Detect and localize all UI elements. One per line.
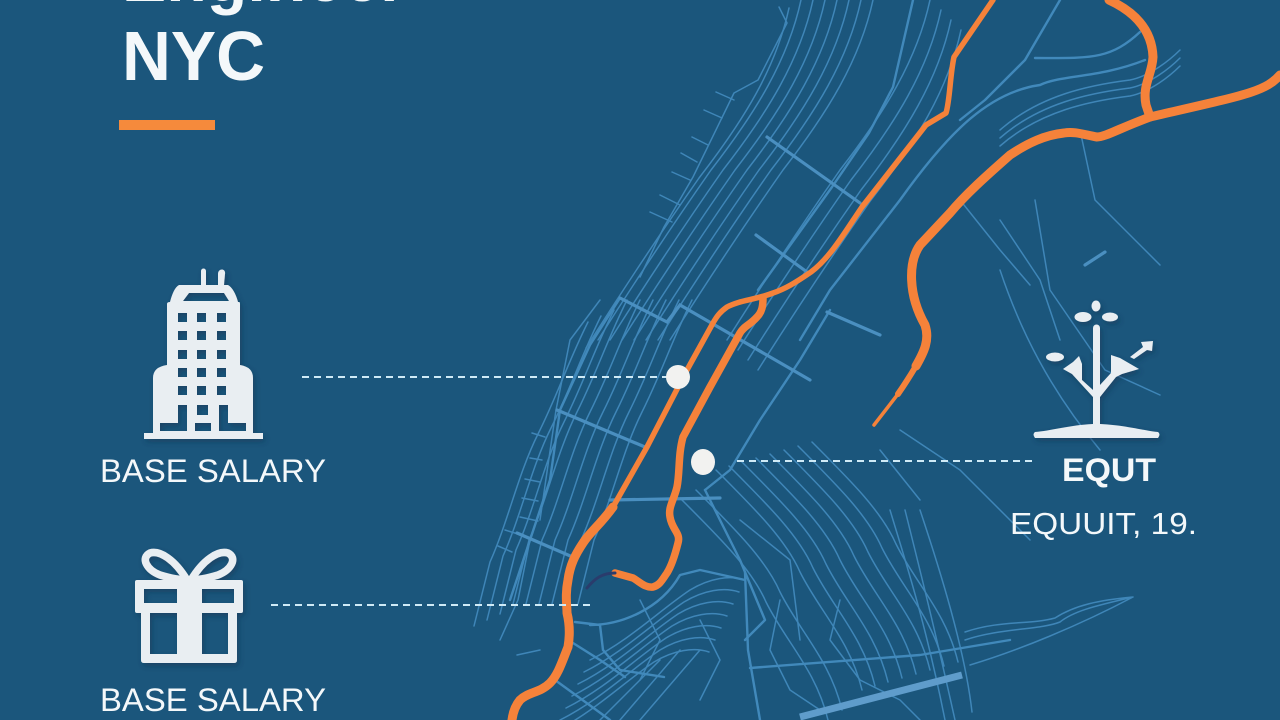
- title accent bar: [119, 120, 215, 130]
- orange route: river arc: [912, 75, 1280, 366]
- orange route: north loop: [1109, 0, 1153, 117]
- map marker: lower: [691, 449, 715, 475]
- icon: gift box: [135, 552, 243, 663]
- icon: office building: [144, 268, 263, 439]
- connector: bonus: [271, 604, 590, 606]
- title: NYC: [122, 17, 265, 95]
- connector: equity: [732, 460, 1032, 462]
- map marker: upper: [666, 365, 690, 389]
- orange route: arc tail: [898, 366, 916, 394]
- connector: base salary: [302, 376, 668, 378]
- label: equity heading: EQUT: [1062, 452, 1156, 488]
- orange route: arc tip: [874, 394, 898, 425]
- orange route: thin west branch: [613, 0, 993, 507]
- orange route: faded tail: [587, 573, 615, 588]
- title: [122, 0, 406, 95]
- label: bonus: BASE SALARY: [100, 682, 326, 718]
- label: base salary: BASE SALARY: [100, 453, 326, 489]
- label: equity value: EQUUIT, 19.: [1010, 506, 1197, 541]
- icon: growing sapling: [1034, 300, 1160, 438]
- orange route: east branch: [615, 298, 763, 587]
- map: street network: [474, 0, 1180, 720]
- orange route: lower west branch: [512, 507, 613, 720]
